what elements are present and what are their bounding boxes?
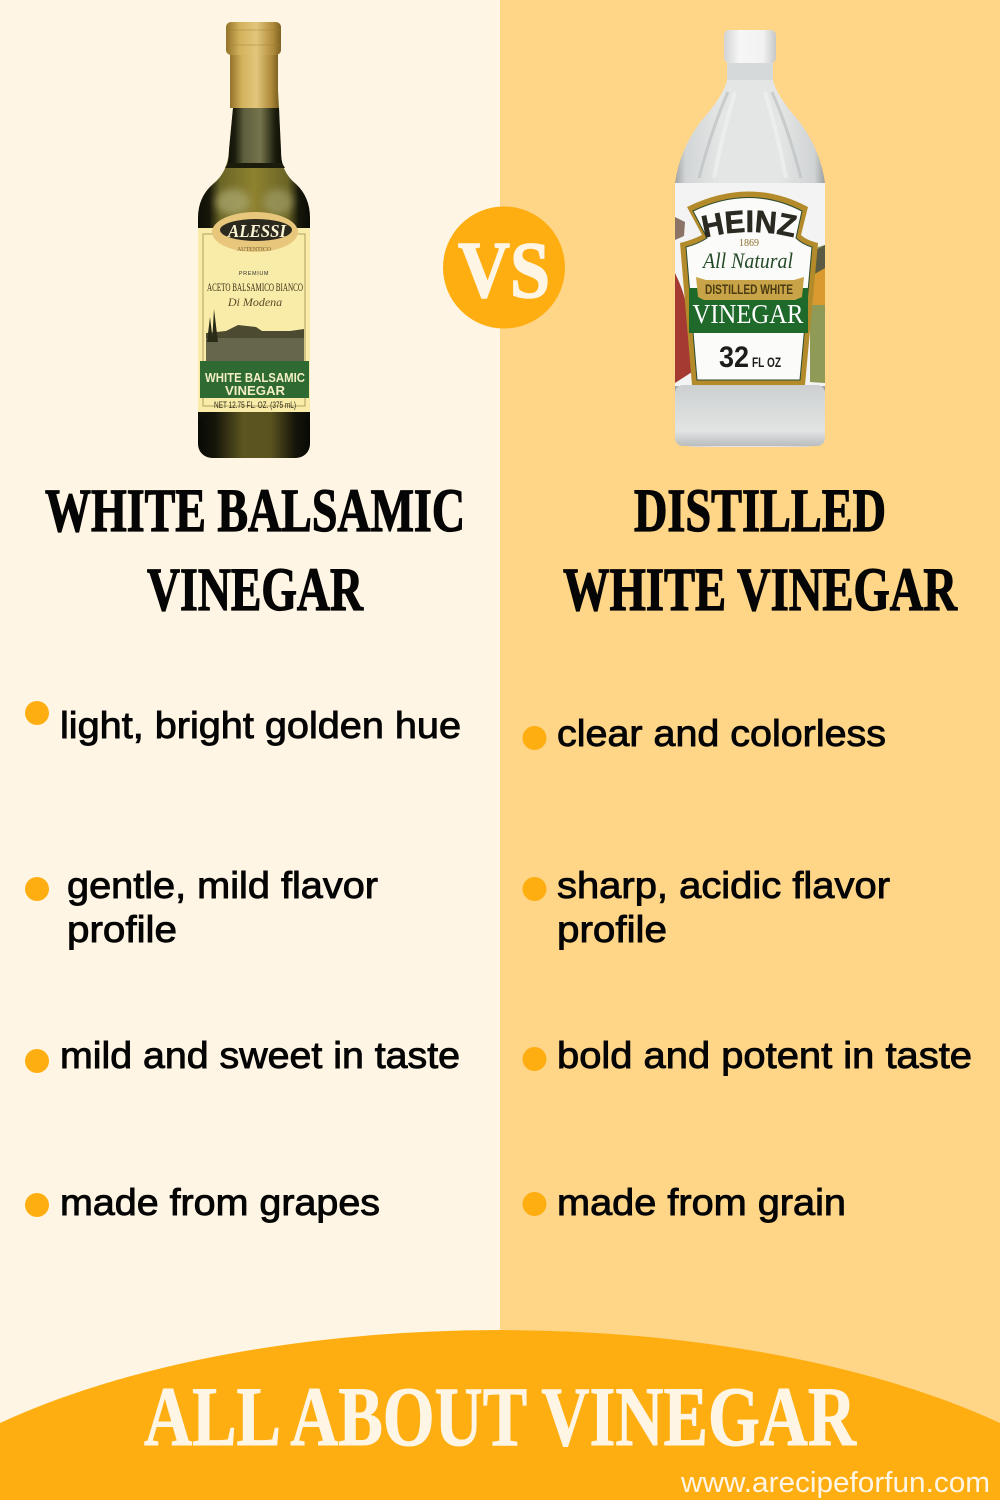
trait: flavor	[522, 865, 890, 950]
trait: source: made from grapes	[60, 1182, 380, 1223]
heading: distilled white vinegar	[563, 478, 958, 624]
trait: taste: mild and sweet in taste	[60, 1035, 460, 1076]
label tomato illustration	[675, 273, 692, 383]
heinz keystone label: VINEGAR	[692, 299, 804, 329]
trait: flavor: profile	[557, 909, 667, 950]
heading: white balsamic vinegar: VINEGAR	[147, 557, 364, 624]
heinz keystone label: DISTILLED WHITE	[705, 281, 793, 297]
trait: flavor	[25, 865, 378, 950]
left panel background	[0, 0, 500, 1500]
heinz keystone label: 1869	[739, 238, 759, 249]
heinz keystone label: 32	[719, 341, 749, 374]
heinz keystone label	[680, 192, 818, 385]
heinz keystone label: HEINZ	[702, 210, 798, 238]
trait: colour: clear and colorless	[557, 713, 886, 754]
trait: flavor: profile	[67, 909, 177, 950]
heading: distilled white vinegar: DISTILLED	[634, 478, 886, 545]
icon: distilled white vinegar bottle	[675, 30, 825, 447]
footer banner	[0, 1330, 1000, 1500]
icon: white balsamic vinegar bottle: VINEGAR	[225, 383, 286, 398]
VS badge	[443, 206, 565, 328]
label logo: AUTENTICO	[237, 247, 272, 253]
icon: white balsamic vinegar bottle: PREMIUM	[239, 271, 269, 277]
label vegetable illustration	[810, 245, 825, 383]
icon: white balsamic vinegar bottle: NET 12.75 FL. OZ. (375 mL)	[214, 400, 296, 410]
label vineyard scene	[206, 309, 304, 361]
trait: colour: light, bright golden hue	[60, 705, 461, 746]
heading: white balsamic vinegar: WHITE BALSAMIC	[45, 478, 465, 545]
heinz keystone label: FL OZ	[752, 354, 781, 370]
icon: white balsamic vinegar bottle	[198, 22, 310, 458]
trait: source: made from grain	[557, 1182, 846, 1223]
right panel background	[500, 0, 1000, 1500]
icon: white balsamic vinegar bottle: ACETO BALSAMICO BIANCO	[207, 280, 303, 294]
icon: white balsamic vinegar bottle: Di Modena	[227, 295, 282, 309]
website credit: www.arecipeforfun.com	[680, 1467, 990, 1499]
icon: white balsamic vinegar bottle: WHITE BALSAMIC	[205, 370, 306, 385]
trait: flavor: sharp, acidic flavor	[557, 865, 890, 906]
heading: white balsamic vinegar	[45, 478, 465, 624]
VS badge: VS	[458, 227, 550, 315]
label logo	[212, 212, 298, 253]
list: white balsamic traits	[25, 701, 461, 1223]
trait: taste: bold and potent in taste	[557, 1035, 972, 1076]
label logo: ALESSI	[227, 221, 287, 241]
trait: flavor: gentle, mild flavor	[67, 865, 378, 906]
heinz keystone label: All Natural	[701, 248, 793, 273]
list: distilled white traits	[522, 713, 972, 1223]
